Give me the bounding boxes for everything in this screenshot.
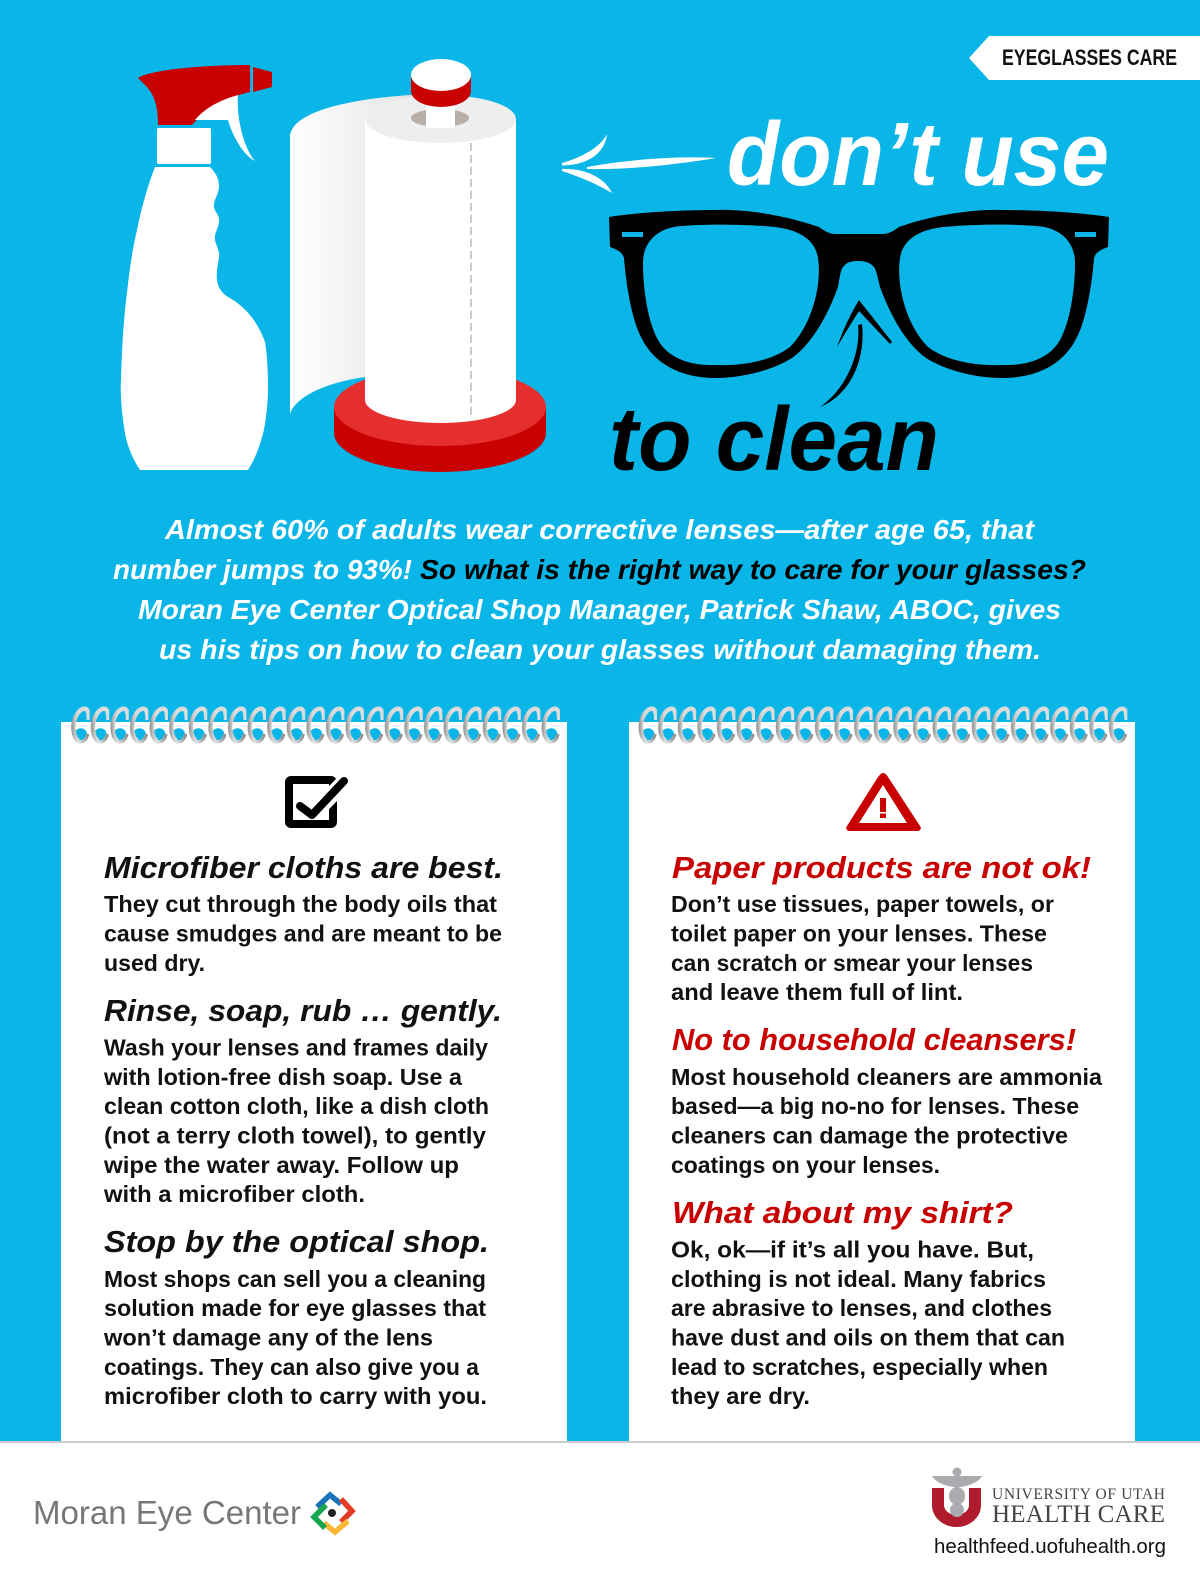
warning: shirt: What about my shirt? bbox=[672, 1195, 1013, 1230]
warning: shirt bbox=[671, 1195, 1065, 1409]
tip: microfiber cloths: used dry. bbox=[104, 950, 205, 976]
icon: black glasses bbox=[609, 210, 1109, 378]
warning: paper products: can scratch or smear your lenses bbox=[671, 950, 1033, 976]
warning: household cleansers: coatings on your lenses. bbox=[671, 1152, 940, 1178]
warning: shirt: lead to scratches, especially when bbox=[671, 1354, 1048, 1380]
tip: optical shop: Most shops can sell you a cleaning bbox=[104, 1266, 486, 1292]
tip: optical shop: Stop by the optical shop. bbox=[104, 1224, 489, 1259]
warning: household cleansers: Most household cleaners are ammonia bbox=[671, 1064, 1103, 1090]
warning: shirt: have dust and oils on them that can bbox=[671, 1324, 1065, 1350]
warning: paper products: and leave them full of lint. bbox=[671, 979, 963, 1005]
tag: eyeglasses care bbox=[969, 36, 1200, 80]
website url: healthfeed.uofuhealth.org bbox=[934, 1536, 1166, 1558]
logo: University of Utah Health Care: UNIVERSITY OF UTAH bbox=[992, 1486, 1165, 1503]
logo: University of Utah Health Care: HEALTH CARE bbox=[992, 1501, 1165, 1528]
footer band bbox=[0, 1441, 1200, 1584]
icon: warning triangle bbox=[846, 773, 921, 831]
warning: paper products bbox=[671, 850, 1091, 1005]
tip: microfiber cloths: Microfiber cloths are best. bbox=[104, 850, 503, 885]
tip: rinse and soap: clean cotton cloth, like a dish cloth bbox=[104, 1093, 489, 1119]
tip: rinse and soap: with lotion-free dish soap. Use a bbox=[103, 1064, 463, 1090]
arrow: pointing left to products bbox=[562, 134, 716, 193]
intro text: Almost 60% of adults wear corrective lenses—after age 65, that bbox=[164, 514, 1036, 545]
intro text: number jumps to 93%! bbox=[113, 554, 412, 585]
warning: paper products: Don’t use tissues, paper towels, or bbox=[671, 891, 1054, 917]
tip: rinse and soap: Wash your lenses and frames daily bbox=[104, 1034, 488, 1060]
tip: optical shop: microfiber cloth to carry with you. bbox=[104, 1383, 487, 1409]
tip: microfiber cloths bbox=[104, 850, 503, 976]
tip: rinse and soap: wipe the water away. Follow up bbox=[103, 1152, 459, 1178]
intro text: us his tips on how to clean your glasses without damaging them. bbox=[159, 634, 1041, 665]
tip: optical shop: coatings. They can also give you a bbox=[104, 1354, 480, 1380]
warning: shirt: they are dry. bbox=[671, 1383, 810, 1409]
warning: paper products: Paper products are not ok! bbox=[672, 850, 1091, 885]
spiral binding bbox=[70, 705, 560, 745]
warning: household cleansers: cleaners can damage the protective bbox=[671, 1122, 1068, 1148]
warning: shirt: clothing is not ideal. Many fabrics bbox=[671, 1266, 1046, 1292]
tip: microfiber cloths: They cut through the body oils that bbox=[104, 891, 497, 917]
icon: paper towel roll bbox=[290, 59, 546, 472]
tip: optical shop bbox=[103, 1224, 489, 1409]
panel: do tips bbox=[61, 705, 567, 1444]
icon: checkbox bbox=[289, 777, 349, 824]
intro text: Moran Eye Center Optical Shop Manager, Patrick Shaw, ABOC, gives bbox=[138, 594, 1061, 625]
intro text: So what is the right way to care for your glasses? bbox=[420, 554, 1086, 585]
heading: don't use: don’t use bbox=[727, 105, 1109, 205]
logo: University of Utah Health Care bbox=[932, 1468, 1165, 1528]
warning: household cleansers: based—a big no-no for lenses. These bbox=[671, 1093, 1079, 1119]
tip: optical shop: solution made for eye glasses that bbox=[104, 1295, 486, 1321]
arrow: pointing up to glasses bbox=[820, 300, 892, 407]
logo: Moran Eye Center: Moran Eye Center bbox=[33, 1494, 301, 1531]
tip: microfiber cloths: cause smudges and are meant to be bbox=[104, 920, 502, 946]
intro text bbox=[113, 514, 1086, 665]
warning: paper products: toilet paper on your lenses. These bbox=[671, 920, 1047, 946]
warning: household cleansers bbox=[671, 1022, 1103, 1178]
warning: household cleansers: No to household cleansers! bbox=[672, 1022, 1076, 1057]
panel: don't tips bbox=[629, 705, 1135, 1444]
tip: rinse and soap: Rinse, soap, rub … gently. bbox=[104, 993, 502, 1028]
spiral binding bbox=[637, 705, 1127, 745]
tip: rinse and soap bbox=[103, 993, 502, 1207]
heading: to clean: to clean bbox=[609, 390, 939, 490]
tip: optical shop: won’t damage any of the lens bbox=[103, 1324, 433, 1350]
tip: rinse and soap: with a microfiber cloth. bbox=[103, 1181, 365, 1207]
warning: shirt: Ok, ok—if it’s all you have. But, bbox=[671, 1236, 1034, 1262]
warning: shirt: are abrasive to lenses, and clothes bbox=[671, 1295, 1052, 1321]
icon: spray bottle bbox=[121, 65, 272, 470]
tip: rinse and soap: (not a terry cloth towel), to gently bbox=[104, 1122, 486, 1148]
